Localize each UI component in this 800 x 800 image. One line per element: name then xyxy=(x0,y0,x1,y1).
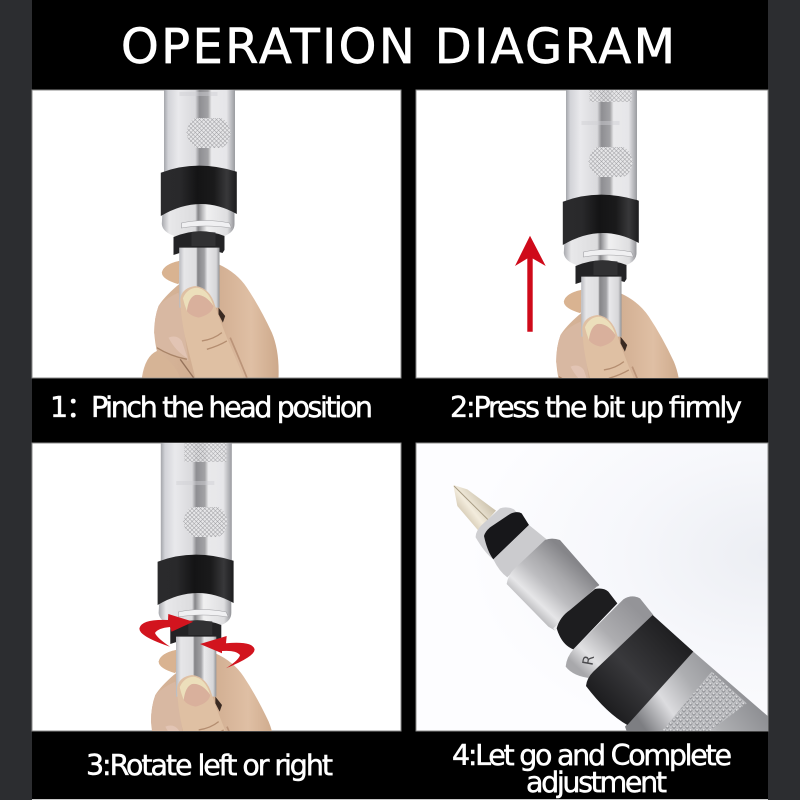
icon: screwdriver rotated in hand xyxy=(151,443,272,731)
bottom edge line xyxy=(32,799,768,800)
icon: angled screwdriver with bit xyxy=(453,485,780,740)
arrow: red rotation arrow lower xyxy=(200,636,255,668)
panel: step 3 rotate xyxy=(32,442,402,732)
caption: step 4: adjustment xyxy=(526,766,667,799)
caption: step 1: Pinch the head position xyxy=(91,391,373,424)
panel: step 1 pinch the head xyxy=(32,90,402,378)
arrow: red rotation arrow upper xyxy=(139,614,193,647)
panel: step 2 press the bit up xyxy=(416,90,768,378)
title: OPERATION DIAGRAM xyxy=(121,19,675,75)
icon: screwdriver pressed upward in hand xyxy=(556,90,679,378)
caption: step 1: 1： xyxy=(50,391,95,424)
icon: screwdriver held in hand xyxy=(142,90,279,378)
arrow: red up arrow xyxy=(515,236,546,332)
icon: angled screwdriver with bit: R xyxy=(580,654,598,667)
caption: step 3: 3:Rotate left or right xyxy=(86,749,333,782)
caption: step 4 xyxy=(452,739,732,799)
caption: step 4: 4:Let go and Complete xyxy=(452,739,732,772)
caption: step 2: 2:Press the bit up firmly xyxy=(450,391,742,424)
panel: step 4 finished tool xyxy=(416,443,780,740)
